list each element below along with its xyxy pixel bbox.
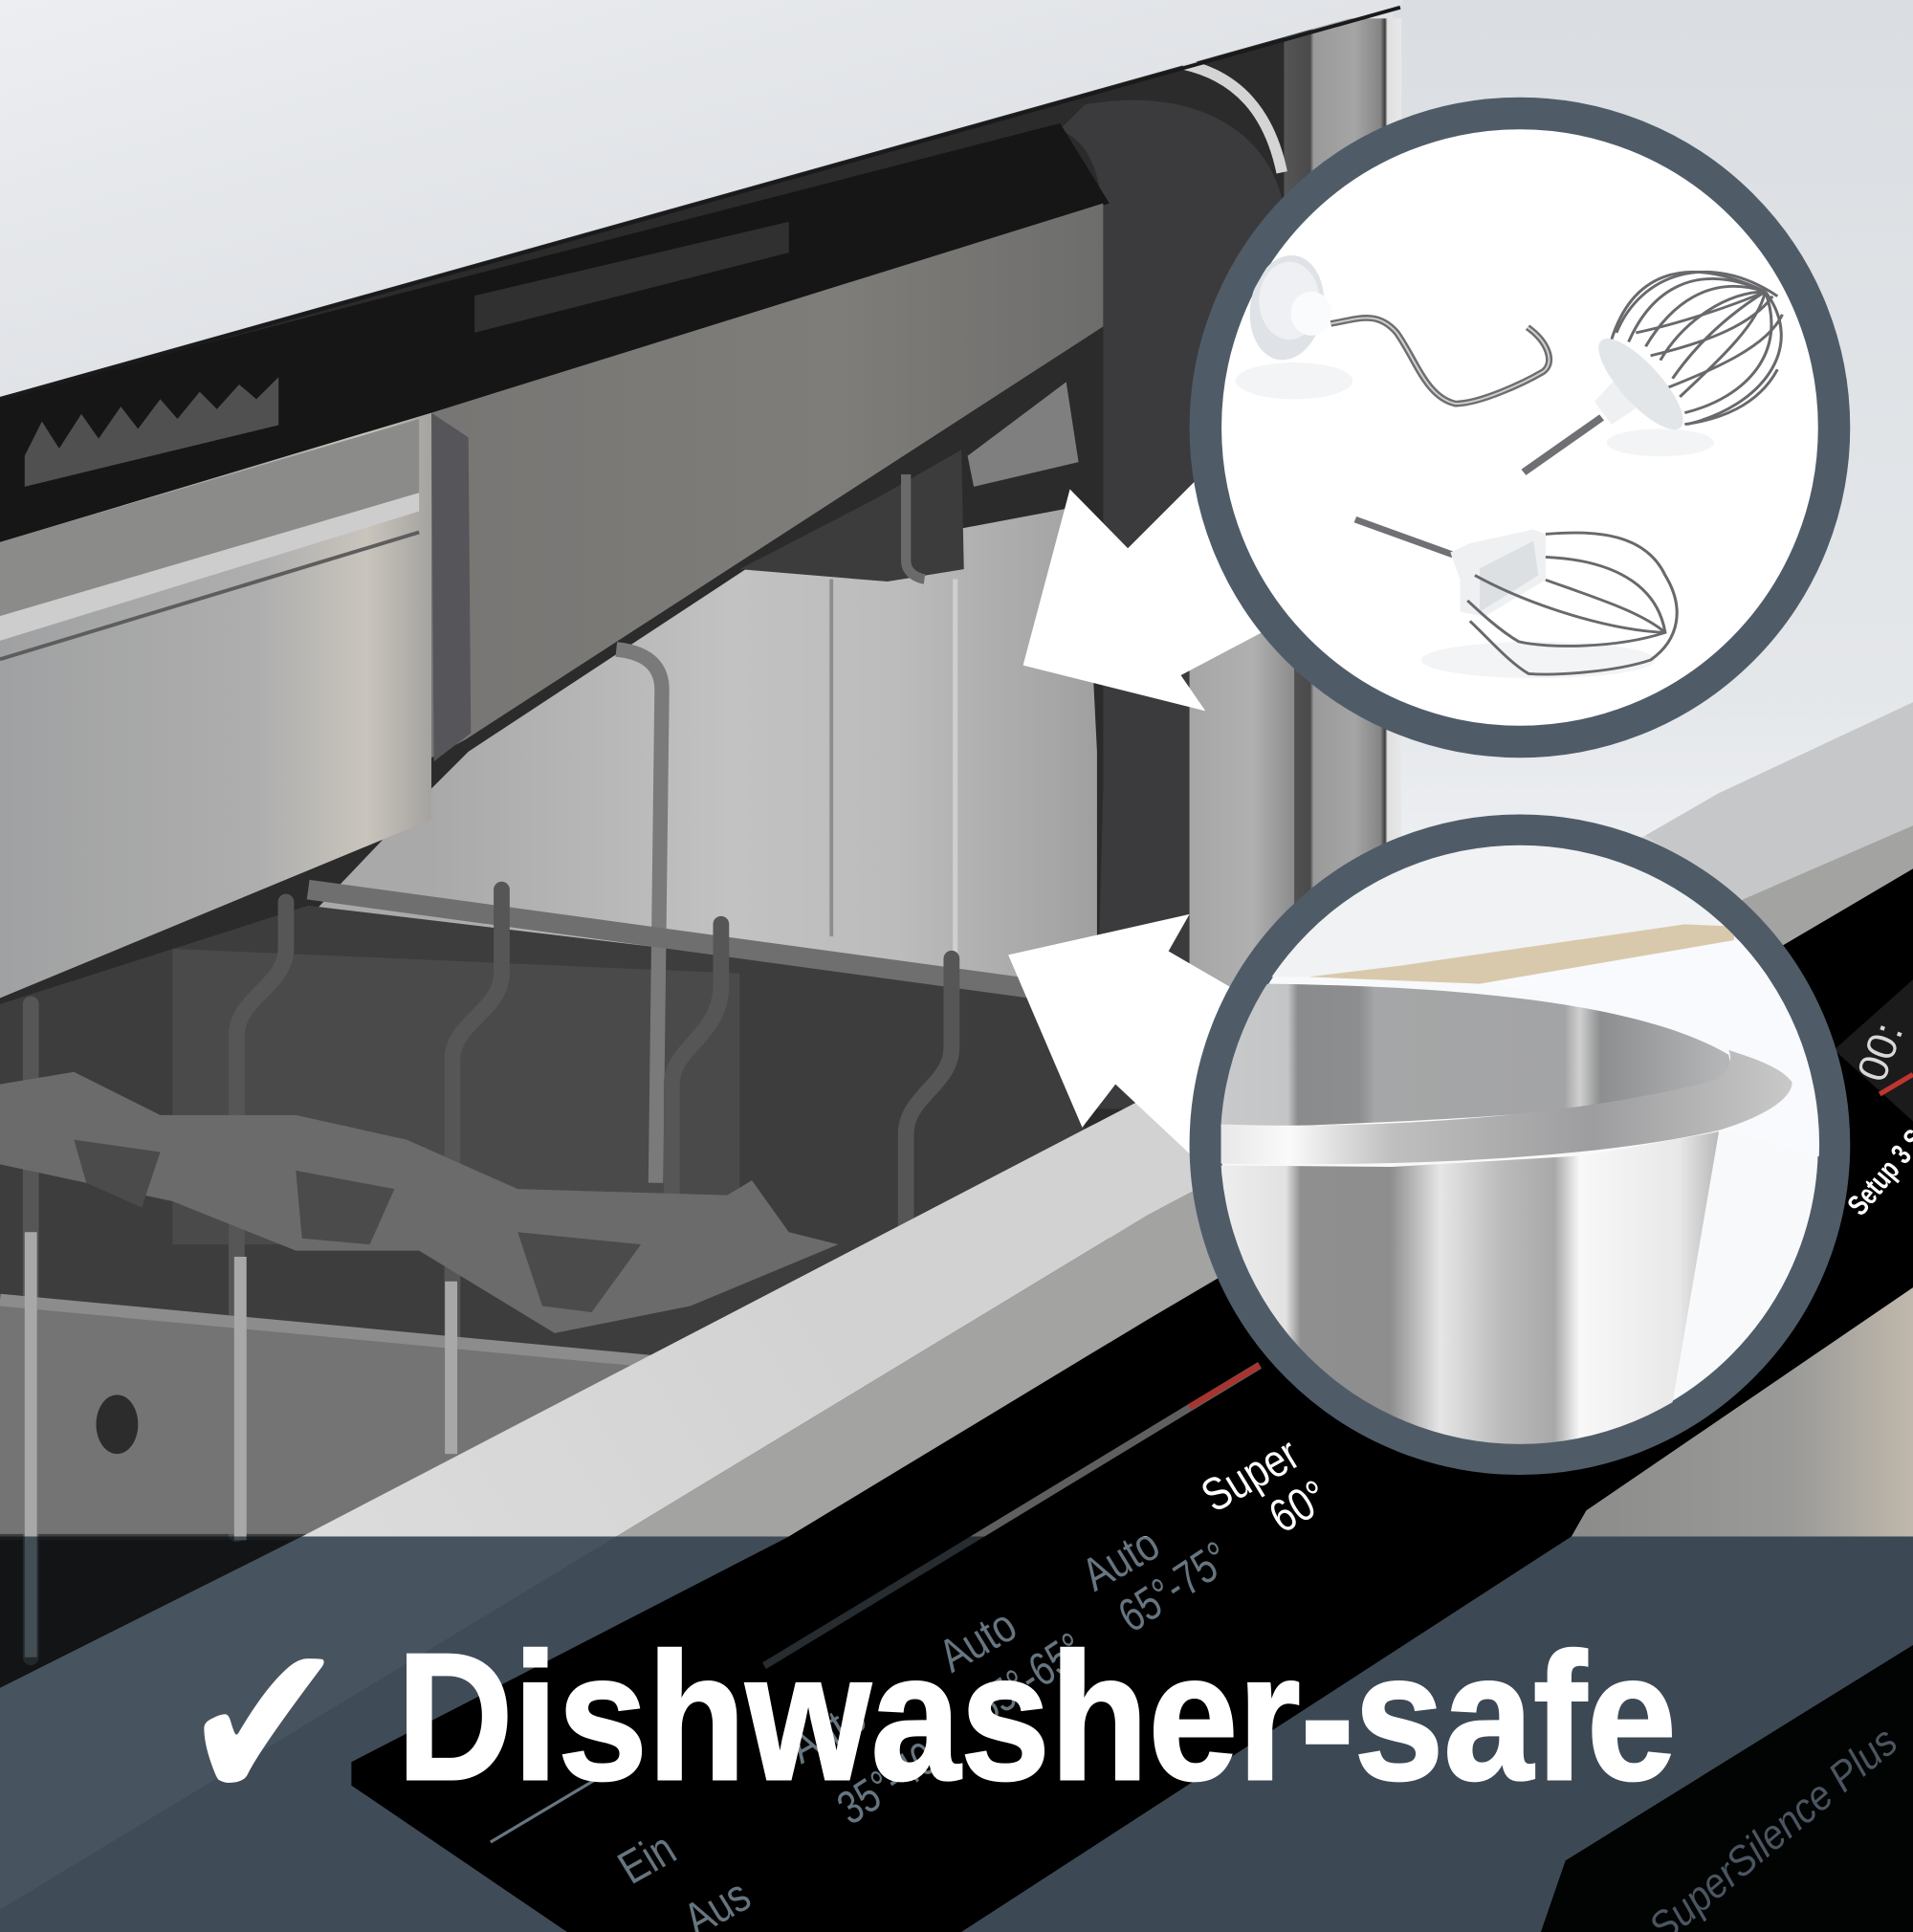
red indicator line <box>1190 1365 1260 1407</box>
silver spray bar <box>431 204 1103 757</box>
lower door dark strip <box>0 825 1913 1932</box>
cutlery tray teeth <box>25 377 278 487</box>
bracket hook <box>906 474 924 579</box>
timer display <box>1835 979 1913 1121</box>
rack tines <box>31 889 952 1658</box>
control panel labels: Super <box>1193 1428 1308 1522</box>
control panel slit <box>764 1365 1260 1666</box>
spray bar end cap <box>431 413 471 761</box>
side metal panel <box>1190 628 1294 1010</box>
arrow: from accessories to rack <box>1023 474 1269 711</box>
arrow: from bowl to rack <box>1008 914 1245 1176</box>
dark tub interior <box>0 37 1285 1932</box>
bowl body <box>1221 1131 1719 1448</box>
right frame strip <box>961 1287 1913 1932</box>
control panel labels: Auto <box>1073 1519 1169 1601</box>
soft shadows <box>1236 362 1714 678</box>
wire hook on back wall <box>616 649 662 1183</box>
control panel labels: 60° <box>1261 1471 1338 1543</box>
door gasket <box>1060 100 1285 1109</box>
dough hook <box>1242 251 1550 404</box>
check mark: ✔ <box>181 1591 347 1856</box>
whisk collar <box>1594 381 1636 425</box>
cutlery basket <box>0 1072 838 1333</box>
accessories drawing <box>1236 251 1782 678</box>
front bar upper strip <box>0 419 419 616</box>
front rack bar <box>0 413 431 998</box>
wooden worktop strip <box>1308 924 1736 984</box>
circle: stainless steel bowl <box>1205 830 1835 1459</box>
wall behind the dishwasher <box>1393 0 1913 986</box>
front bar shadow line <box>0 533 419 659</box>
banner tone over door and frame <box>0 1536 1913 1932</box>
dark lower tub wall <box>0 906 1085 1540</box>
control panel labels: 55°-65° <box>964 1622 1093 1734</box>
lower door silver top surface <box>0 702 1913 1910</box>
control panel labels: Auto <box>931 1600 1025 1682</box>
tub back wall <box>308 505 1097 1035</box>
upper door panel <box>0 0 1402 397</box>
front bar highlight strip <box>0 493 419 641</box>
back wall seam <box>829 579 833 936</box>
black control panel <box>351 868 1913 1932</box>
bowl disc <box>1205 830 1835 1459</box>
control panel labels: Auto <box>780 1691 875 1773</box>
metal door column <box>1285 18 1401 1004</box>
door edge shadow <box>0 8 1400 399</box>
control panel labels <box>609 1104 1913 1932</box>
rack rail <box>308 889 1029 988</box>
bowl rim <box>1221 1050 1792 1164</box>
upper tray highlight <box>474 222 789 333</box>
whisk disc <box>1598 339 1683 429</box>
counter corner <box>1645 702 1913 899</box>
banner background <box>0 1536 1913 1932</box>
headline: dishwasher-safe <box>181 1591 1677 1856</box>
wall in the background <box>1272 845 1768 977</box>
balloon whisk <box>1612 272 1782 425</box>
circle: mixer accessories <box>1205 114 1835 742</box>
panel marker line <box>491 1781 594 1842</box>
tub panel shading <box>172 949 739 1244</box>
rods in front of band <box>31 1232 451 1658</box>
control panel labels: 35°-40° <box>828 1723 957 1835</box>
accessories disc <box>1205 114 1835 742</box>
control panel labels: Ein <box>609 1823 685 1894</box>
basket facets <box>74 1140 641 1312</box>
floor in the background <box>1525 939 1819 1157</box>
timer red mark <box>1880 1074 1913 1094</box>
flat beater <box>1355 519 1677 674</box>
whisk shaft <box>1524 417 1602 472</box>
upper rack bracket <box>739 450 964 582</box>
bowl drawing <box>1221 840 1831 1448</box>
headline text: Dishwasher-safe <box>397 1616 1677 1818</box>
bowl inside <box>1221 984 1733 1128</box>
lower metal tub band <box>0 1306 653 1534</box>
thin vertical rod <box>954 579 957 961</box>
control panel labels: 65°-75° <box>1110 1531 1239 1643</box>
upper dark cavity <box>0 123 1110 542</box>
rail in lower tub <box>0 1300 653 1362</box>
timer digits: 00: <box>1848 1017 1912 1087</box>
lower right black plate <box>1541 1645 1913 1932</box>
shelf behind bracket <box>968 382 1079 487</box>
drain hole <box>97 1394 138 1454</box>
chrome hinge curve <box>1183 64 1282 172</box>
